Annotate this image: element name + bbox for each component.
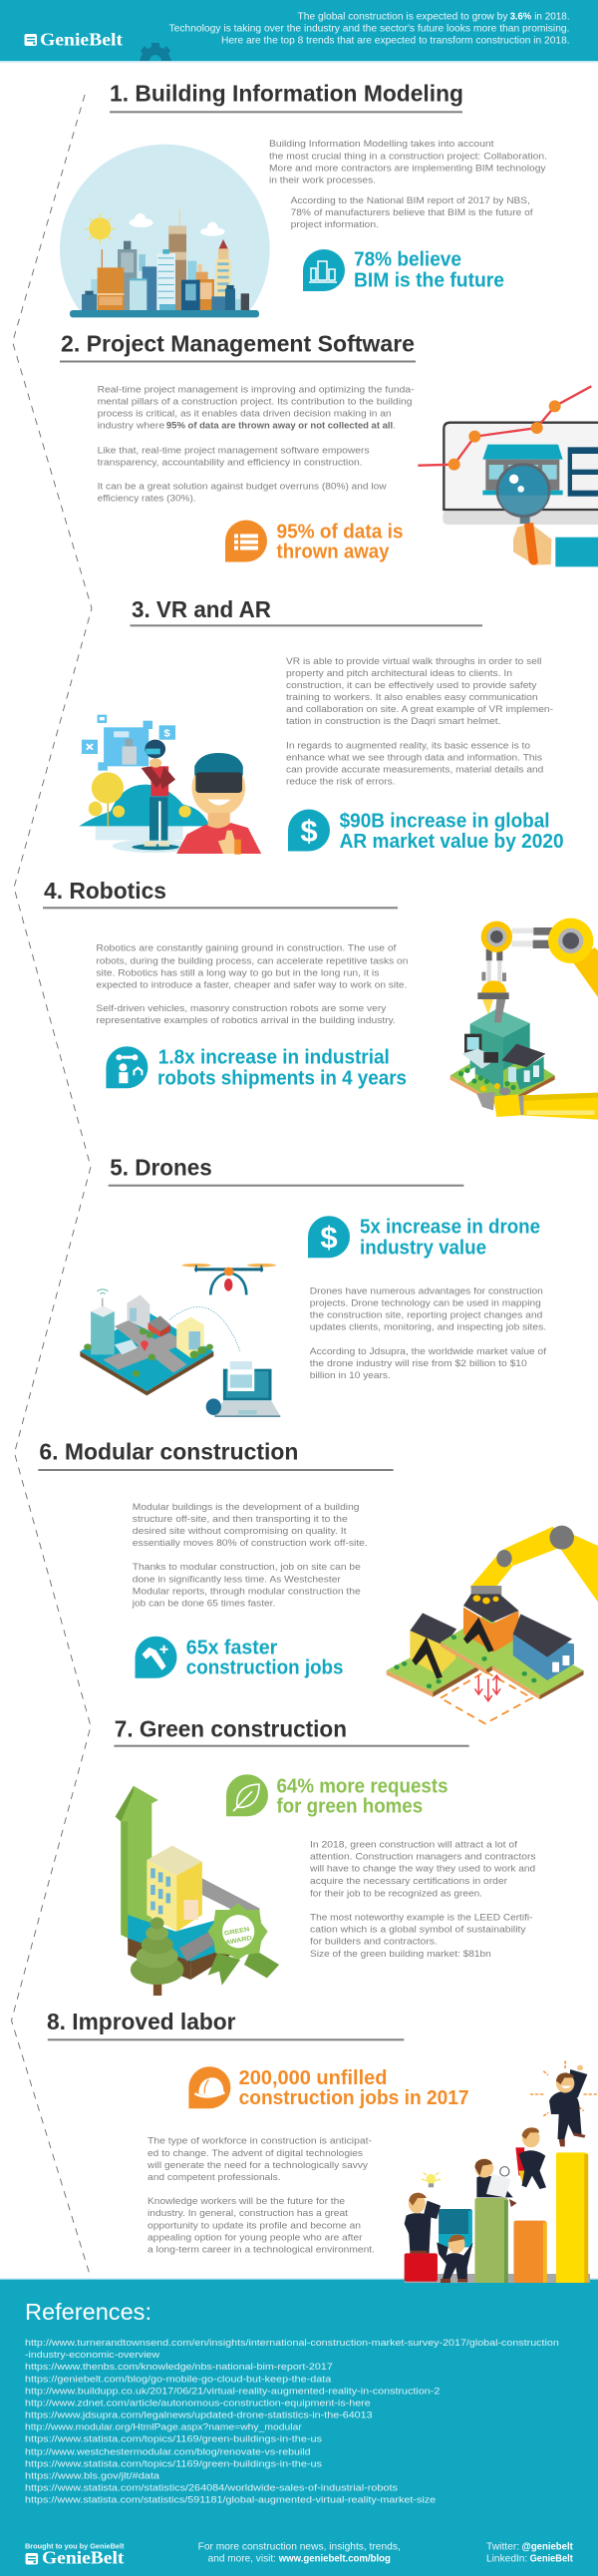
footer call to action: and more, visit: [208, 2554, 276, 2565]
stat: 5x: 5x increase in drone [360, 1217, 540, 1239]
text block [98, 385, 415, 504]
panel: 5 drones [80, 1154, 546, 1417]
reference links: https://www.statista.com/topics/1169/green-buildings-in-the-us [25, 2458, 322, 2469]
text block: project information. [291, 219, 379, 230]
text block: the drone industry will rise from $2 billion to $10 [310, 1358, 527, 1369]
text block: According to the National BIM report of 2017 by NBS, [291, 195, 530, 206]
text block: tation in construction is the Daqri smart helmet. [286, 716, 500, 727]
text block: appealing option for young people who are after [148, 2233, 363, 2244]
text block: representative examples of robotics arrival in the building industry. [96, 1015, 396, 1026]
footer brand [25, 2541, 125, 2568]
text block: opportunity to update its profile and become an [148, 2221, 361, 2232]
text block [309, 1840, 536, 1960]
stat: 95% of data [225, 521, 403, 562]
dashed timeline path [12, 95, 92, 2278]
text block: can provide accurate measurements, material details and [286, 765, 543, 776]
text block: construction, it can be effectively used to provide safety [286, 680, 537, 691]
references footer [0, 2061, 598, 2576]
header banner [0, 0, 598, 62]
text block: will have to change the way they used to work and [309, 1864, 535, 1875]
panel: 3 VR and AR [79, 596, 564, 855]
text block: industry. In general, construction has a great [148, 2208, 348, 2219]
icon: dollar: $ [300, 814, 318, 848]
reference links: https://www.jdsupra.com/legalnews/updated-drone-statistics-in-the-64013 [25, 2410, 373, 2421]
text block: Modular reports, through modular construction the [133, 1586, 361, 1597]
reference links [25, 2338, 559, 2505]
text block: Knowledge workers will be the future for the [148, 2196, 345, 2207]
stat: 78% believe: 78% believe [354, 249, 461, 271]
intro text: in 2018. [534, 12, 570, 22]
text block: Self-driven vehicles, masonry construction robots are some very [96, 1003, 387, 1014]
text block: and collaboration on site. A great example of VR implemen- [286, 704, 553, 715]
text block: In 2018, green construction will attract a lot of [310, 1840, 517, 1851]
reference links: http://www.turnerandtownsend.com/en/insights/international-construction-market-survey-2017/global-construction [25, 2338, 559, 2349]
text block [269, 139, 547, 230]
text block: Modular buildings is the development of a building [133, 1502, 359, 1513]
heading: 8. Improved labor [47, 2009, 236, 2034]
text block: Drones have numerous advantages for construction [310, 1286, 543, 1296]
illustration: drone over city and laptop [80, 1264, 280, 1417]
text block: Size of the green building market: $81bn [310, 1949, 491, 1960]
text block: the most crucial thing in a construction project: Collaboration. [269, 152, 547, 163]
text block [310, 1286, 546, 1381]
illustration: green building with award: GREEN [223, 1926, 250, 1937]
stat: 64%: for green homes [277, 1795, 423, 1817]
icon: dollar: $ [320, 1220, 338, 1255]
text block [132, 1502, 368, 1609]
text block: More and more contractors are implementing BIM technology [269, 164, 546, 175]
heading: 6. Modular construction [39, 1438, 298, 1464]
panel: 6 modular construction [38, 1438, 598, 1723]
illustration: robot arm holding house [450, 919, 598, 1120]
text block: cation which is a global symbol of sustainability [310, 1924, 526, 1935]
panel: 8 improved labor [47, 2009, 469, 2256]
text block: Real-time project management is improving and optimizing the funda- [98, 385, 415, 396]
text block: Building Information Modelling takes into account [269, 139, 494, 150]
illustration: monitor with magnifier [418, 386, 598, 566]
text block: billion in 10 years. [310, 1370, 391, 1381]
stat: 200,000: construction jobs in 2017 [239, 2087, 469, 2109]
footer call to action: For more construction news, insights, trends, [198, 2542, 401, 2553]
text block: mental pillars of a construction project. Its contribution to the building [98, 397, 413, 408]
text block: 95% of data are thrown away or not collected at all [166, 421, 393, 432]
text block: expected to introduce a faster, cheaper and safer way to work on site. [96, 980, 407, 991]
reference links: http://www.zdnet.com/article/autonomous-construction-equipment-is-here [25, 2398, 371, 2409]
text block: robots, during the building process, can accelerate repetitive tasks on [96, 956, 408, 967]
stat: 78% believe: BIM is the future [354, 269, 504, 291]
intro text: 3.6% [510, 12, 531, 22]
text block: property and pitch architectural ideas to clients. In [286, 668, 512, 679]
stat: 1.8x: 1.8x increase in industrial [158, 1047, 390, 1069]
stat: 78% believe [303, 249, 504, 291]
stat: 95% of data: thrown away [277, 541, 390, 562]
text block [96, 943, 408, 1026]
heading: 5. Drones [110, 1154, 212, 1180]
text block: Thanks to modular construction, job on site can be [133, 1562, 361, 1573]
icon: gear [140, 43, 171, 61]
text block: The type of workforce in construction is anticipat- [148, 2135, 372, 2146]
footer social links [486, 2542, 573, 2565]
stat: 95% of data: 95% of data is [277, 521, 403, 543]
illustration: city dome [60, 145, 270, 317]
text block: process is critical, as it enables data driven decision making in an [98, 409, 392, 420]
text block: training to workers. It also enables easy communication [286, 692, 538, 703]
stat: $90B: $90B increase in global [340, 810, 550, 832]
text block: a long-term career in a technological environment. [148, 2245, 375, 2256]
illustration: green building with award: AWARD [225, 1935, 253, 1947]
reference links: http://www.buildupp.co.uk/2017/06/21/virtual-reality-augmented-reality-in-construction-2 [25, 2387, 440, 2397]
text block: site. Robotics has still a long way to go but in the long run, it is [96, 968, 380, 979]
stat: 65x [136, 1637, 343, 1679]
text block: attention. Construction managers and contractors [310, 1852, 536, 1863]
icon: hard hat [188, 2066, 230, 2108]
reference links: http://www.modular.org/HtmlPage.aspx?name=why_modular [25, 2422, 303, 2433]
stat: $90B: AR market value by 2020 [340, 831, 564, 853]
heading: 1. Building Information Modeling [110, 81, 463, 107]
reference links: https://www.statista.com/topics/1169/green-buildings-in-the-us [25, 2434, 322, 2445]
reference links: https://www.statista.com/statistics/264084/worldwide-sales-of-industrial-robots [25, 2482, 398, 2493]
text block: 78% of manufacturers believe that BIM is the future of [291, 207, 533, 218]
text block: reduce the risk of errors. [286, 777, 395, 788]
text block [147, 2135, 375, 2256]
heading: 7. Green construction [115, 1716, 347, 1742]
stat: 64%: 64% more requests [277, 1775, 448, 1797]
reference links: https://www.bls.gov/jlt/#data [25, 2470, 160, 2481]
illustration: VR users: $ [163, 728, 170, 739]
footer call to action [198, 2542, 401, 2565]
text block [286, 656, 553, 788]
stat: $90B [288, 810, 564, 853]
text block: industry where [98, 421, 164, 432]
icon: list [225, 521, 267, 562]
footer social links: GenieBelt [530, 2554, 573, 2565]
illustration: VR users [79, 715, 261, 855]
reference links: http://www.westchestermodular.com/blog/renovate-vs-rebuild [25, 2446, 311, 2457]
text block: The most noteworthy example is the LEED Certifi- [310, 1912, 532, 1923]
text block: in their work processes. [269, 176, 376, 186]
icon: dollar [288, 810, 330, 852]
footer call to action: www.geniebelt.com/blog [278, 2554, 391, 2565]
text block: enhance what we see through data and information. This [286, 753, 542, 764]
footer social links: LinkedIn: [486, 2554, 527, 2565]
heading: 2. Project Management Software [61, 331, 415, 357]
stat: 5x [308, 1216, 540, 1259]
illustration: robot arm with modular houses [387, 1526, 598, 1723]
intro text: Technology is taking over the industry and the sector's future looks more than promising. [169, 24, 570, 34]
text block: . [393, 421, 396, 432]
text block: ed to change. The advent of digital technologies [148, 2148, 363, 2159]
icon: hammer [136, 1637, 177, 1678]
stat: 64% [226, 1774, 448, 1817]
stat: 200,000 [188, 2066, 469, 2109]
text block: acquire the necessary certifications in order [310, 1876, 508, 1887]
text block: projects. Drone technology can be used in mapping [310, 1297, 541, 1308]
text block: In regards to augmented reality, its basic essence is to [286, 741, 530, 752]
text block: job can be done 65 times faster. [132, 1598, 275, 1609]
text block: According to Jdsupra, the worldwide market value of [310, 1346, 546, 1357]
text block: the construction site, reporting project changes and [310, 1309, 542, 1320]
icon: robots and people [106, 1046, 148, 1088]
text block: and competent professionals. [148, 2172, 281, 2183]
footer brand: GenieBelt [42, 2548, 124, 2568]
text block: efficiency rates (30%). [98, 493, 196, 504]
text block: done in significantly less time. As Westchester [133, 1574, 342, 1586]
stat: 5x: industry value [360, 1237, 486, 1259]
text block: desired site without compromising on quality. It [133, 1526, 347, 1537]
text block: Like that, real-time project management software empowers [98, 445, 370, 456]
text block: for their job to be recognized as green. [310, 1888, 482, 1899]
text block: VR is able to provide virtual walk throughs in order to sell [286, 656, 541, 667]
reference links: https://www.statista.com/statistics/591181/global-augmented-virtual-reality-market-size [25, 2494, 436, 2505]
text block: It can be a great solution against budget overruns (80%) and low [98, 481, 387, 492]
illustration: green building with award [116, 1786, 279, 1996]
icon: dollar [308, 1216, 350, 1258]
panel: 7 green construction [114, 1716, 536, 1996]
heading: 3. VR and AR [132, 596, 271, 622]
text block: essentially moves 80% of construction work off-site. [133, 1538, 368, 1549]
reference links: https://www.thenbs.com/knowledge/nbs-national-bim-report-2017 [25, 2362, 333, 2373]
intro text [169, 12, 570, 46]
heading: 4. Robotics [44, 878, 166, 904]
stat: 65x: 65x faster [186, 1638, 278, 1659]
panel: 1 building information modeling [60, 81, 547, 317]
illustration: workers climbing bar chart [405, 2061, 598, 2283]
footer social links: @geniebelt [522, 2542, 573, 2553]
intro text: The global construction is expected to grow by [297, 12, 508, 22]
text block: will generate the need for a technologically savvy [147, 2160, 368, 2171]
stat: 1.8x [106, 1046, 407, 1089]
reference links: https://geniebelt.com/blog/go-mobile-go-cloud-but-keep-the-data [25, 2375, 332, 2386]
text block: updates clients, monitoring, and inspecting job sites. [310, 1321, 546, 1332]
text block: for builders and contractors. [310, 1936, 438, 1947]
stat: 200,000: 200,000 unfilled [239, 2067, 387, 2089]
logo: GenieBelt [40, 29, 123, 49]
text block: Robotics are constantly gaining ground in construction. The use of [96, 943, 397, 954]
panel: 2 project management software [60, 331, 598, 566]
stat: 65x: construction jobs [186, 1657, 343, 1679]
text block: transparency, accountability and efficiency in construction. [98, 457, 363, 468]
references heading: References: [25, 2299, 151, 2325]
icon: leaf [226, 1774, 268, 1816]
icon: buildings [303, 249, 345, 291]
footer brand: Brought to you by GenieBelt [25, 2541, 125, 2550]
text block: structure off-site, and then transporting it to the [133, 1514, 348, 1525]
reference links: -industry-economic-overview [25, 2350, 159, 2361]
panel: 4 robotics [43, 878, 598, 1120]
intro text: Here are the top 8 trends that are expected to transform construction in 2018. [221, 36, 570, 46]
footer social links: Twitter: [486, 2542, 519, 2553]
stat: 1.8x: robots shipments in 4 years [157, 1067, 407, 1089]
